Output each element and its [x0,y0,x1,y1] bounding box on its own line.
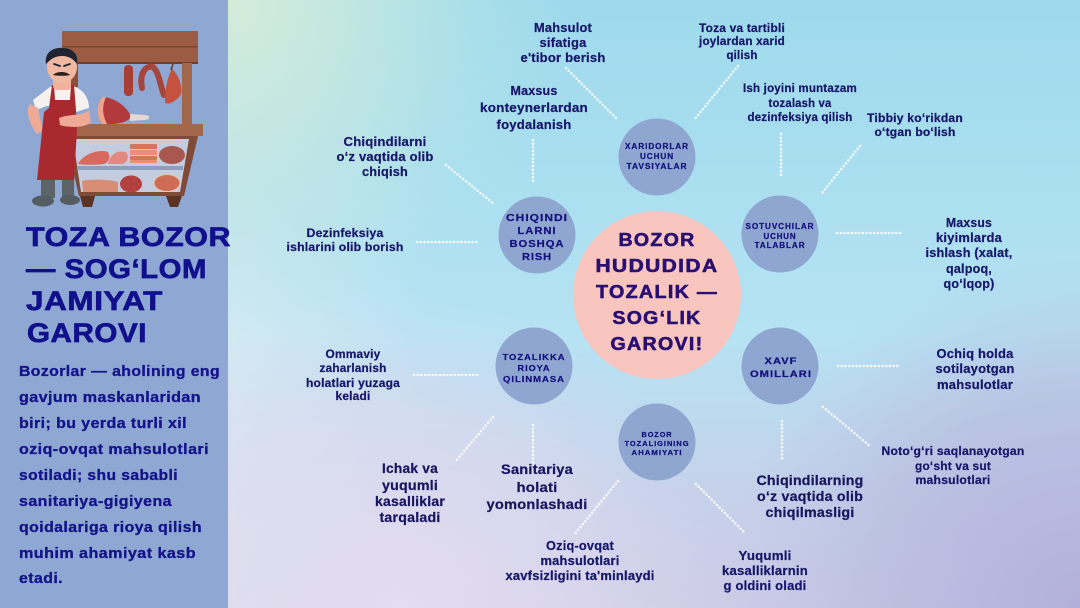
node: Xaridorlar uchun tavsiyalar: TAVSIYALAR [626,162,688,171]
label: Toza va tartibli: joylardan xarid [698,36,785,48]
label: Ochiq holda [936,347,1014,392]
label: Yuqumli kasalliklarning: g oldini oladi [724,579,806,593]
title: GAROVI [27,318,147,348]
label: Ommaviy zaharlanish: keladi [336,391,370,403]
label: Chiqindilarning: chiqilmasligi [766,505,854,520]
label: Ichak va yuqumli [375,461,446,525]
title: — SOG‘LOM [26,254,207,284]
node: Chiqindilarni boshqarish: BOSHQA [510,238,564,250]
illustration: butcher at meat stall [28,31,203,207]
label: Tibbiy ko‘rikdan: o‘tgan bo‘lish [874,127,956,139]
label: Ommaviy zaharlanish: holatlari yuzaga [306,378,400,390]
connectors: dotted lines [414,66,902,535]
node: Chiqindilarni boshqarish: LARNI [518,225,556,237]
label: Maxsus kiyimlarda: qalpoq, [946,262,992,276]
label: Ommaviy zaharlanish [306,349,400,403]
label: Mahsulot sifatiga: sifatiga [540,36,587,50]
label: Tibbiy ko‘rikdan: Tibbiy ko‘rikdan [867,113,963,125]
label: Mahsulot sifatiga: e'tibor berish [520,51,606,65]
central circle [573,211,741,379]
label: Noto‘g‘ri saqlanayotgan: go‘sht va sut [915,461,991,473]
label: Noto‘g‘ri saqlanayotgan: Noto‘g‘ri saqlanayotgan [882,446,1024,458]
label: Maxsus kiyimlarda: Maxsus [946,216,992,230]
label: Toza va tartibli [698,23,785,62]
text block: introduction: oziq-ovqat mahsulotlari [19,441,209,458]
label: Ish joyini: dezinfeksiya qilish [748,112,852,124]
central circle: SOG‘LIK [612,308,702,328]
label: Chiqindilarni vaqtida: chiqish [362,165,408,179]
node: Chiqindilarni boshqarish: CHIQINDI [506,212,568,224]
label: Ochiq holda: Ochiq holda [936,347,1014,361]
label: Maxsus kiyimlarda: kiyimlarda [936,231,1003,245]
node: Chiqindilarni boshqarish: RISH [522,251,552,263]
label: Ommaviy zaharlanish: zaharlanish [320,363,386,375]
text block: introduction [19,363,220,587]
background [228,0,1080,608]
label: Ochiq holda: sotilayotgan [936,362,1014,376]
node: Bozor tozaligining ahamiyati: TOZALIGINING [624,441,690,448]
label: Mahsulot sifatiga [520,21,606,65]
label: Sanitariya holati: yomonlashadi [486,497,588,512]
label: Ommaviy zaharlanish: Ommaviy [326,349,381,361]
label: Ish joyini: Ish joyini muntazam [743,83,857,95]
label: Sanitariya holati: Sanitariya [501,462,573,477]
title [26,222,231,348]
node: Bozor tozaligining ahamiyati: BOZOR [642,432,672,439]
label: Chiqindilarning: Chiqindilarning [756,473,864,488]
label: Chiqindilarni vaqtida [336,135,434,179]
node: Xaridorlar uchun tavsiyalar [618,118,696,196]
node: Xaridorlar uchun tavsiyalar: XARIDORLAR [625,142,689,151]
label: Maxsus kiyimlarda: ishlash (xalat, [926,246,1012,260]
label: Maxsus konteynerlardan: konteynerlardan [480,101,588,115]
text block: introduction: sotiladi; shu sababli [19,467,178,484]
label: Toza va tartibli: qilish [726,50,758,62]
central circle: HUDUDIDA [596,256,718,276]
label: Toza va tartibli: Toza va tartibli [699,23,785,35]
node: Tozalikka rioya qilinmasa: QILINMASA [503,374,565,384]
label: Mahsulot sifatiga: Mahsulot [534,21,593,35]
central circle: GAROVI! [610,334,704,354]
panel: left sidebar [0,0,228,608]
node: Chiqindilarni boshqarish [498,196,576,274]
label: Ochiq holda: mahsulotlar [937,378,1013,392]
label: Sanitariya holati: holati [516,480,558,495]
node: Bozor tozaligining ahamiyati: AHAMIYATI [632,450,682,457]
label: Maxsus kiyimlarda: qo‘lqop) [944,277,994,291]
label: Ichak va yuqumli: Ichak va [382,461,438,476]
central circle: TOZALIK — [596,282,718,302]
label: Yuqumli kasalliklarning: Yuqumli [738,549,792,563]
node: Sotuvchilar uchun talablar [742,196,818,272]
label: Dezinfeksiya: Dezinfeksiya [306,228,384,240]
node: Sotuvchilar uchun talablar: UCHUN [764,232,796,241]
label: Maxsus kiyimlarda [926,216,1012,291]
text block: introduction: biri; bu yerda turli xil [19,415,187,432]
label: Ichak va yuqumli: yuqumli [382,478,438,493]
node: Xaridorlar uchun tavsiyalar: UCHUN [640,152,674,161]
label: Chiqindilarni vaqtida: o‘z vaqtida olib [336,150,434,164]
label: Maxsus konteynerlardan: Maxsus [510,84,558,98]
node: Tozalikka rioya qilinmasa: RIOYA [518,363,550,373]
label: Ichak va yuqumli: tarqaladi [380,510,440,525]
label: Sanitariya holati [486,462,588,512]
label: Yuqumli kasalliklarning: kasalliklarnin [722,564,808,578]
text block: introduction: muhim ahamiyat kasb [19,545,196,562]
label: Oziq-ovqat: xavfsizligini ta'minlaydi [506,569,654,583]
text block: introduction: etadi. [19,570,63,587]
node: Xavf omillari [742,328,818,404]
node: Bozor tozaligining ahamiyati [618,404,696,480]
label: Noto‘g‘ri saqlanayotgan: mahsulotlari [916,475,990,487]
label: Noto‘g‘ri saqlanayotgan [882,446,1024,487]
text block: introduction: sanitariya-gigiyena [19,493,172,510]
label: Maxsus konteynerlardan [480,84,588,132]
label: Tibbiy ko‘rikdan [867,113,963,139]
label: Ish joyini: tozalash va [768,98,832,110]
text block: introduction: gavjum maskanlaridan [19,389,201,406]
title: JAMIYAT [26,286,163,316]
label: Ish joyini [743,83,857,124]
label: Oziq-ovqat [506,539,654,583]
node: Tozalikka rioya qilinmasa [496,328,572,404]
label: Chiqindilarning [756,473,864,520]
label: Chiqindilarni vaqtida: Chiqindilarni [344,135,426,149]
label: Chiqindilarning: o‘z vaqtida olib [757,489,863,504]
title: TOZA BOZOR [26,222,231,252]
node: Tozalikka rioya qilinmasa: TOZALIKKA [502,352,566,362]
node: Sotuvchilar uchun talablar: SOTUVCHILAR [746,222,814,231]
label: Ichak va yuqumli: kasalliklar [375,494,446,509]
label: Yuqumli kasalliklarning [722,549,808,593]
label: Dezinfeksiya [286,228,404,254]
text block: introduction: Bozorlar — aholining eng [19,363,220,380]
label: Dezinfeksiya: ishlarini olib borish [286,242,404,254]
label: Maxsus konteynerlardan: foydalanish [496,118,572,132]
node: Xavf omillari: OMILLARI [750,369,812,380]
text block: introduction: qoidalariga rioya qilish [19,519,202,536]
node: Sotuvchilar uchun talablar: TALABLAR [754,241,806,250]
label: Oziq-ovqat: mahsulotlari [540,554,620,568]
label: Oziq-ovqat: Oziq-ovqat [546,539,615,553]
central circle: BOZOR [618,230,696,250]
node: Xavf omillari: XAVF [764,356,798,367]
